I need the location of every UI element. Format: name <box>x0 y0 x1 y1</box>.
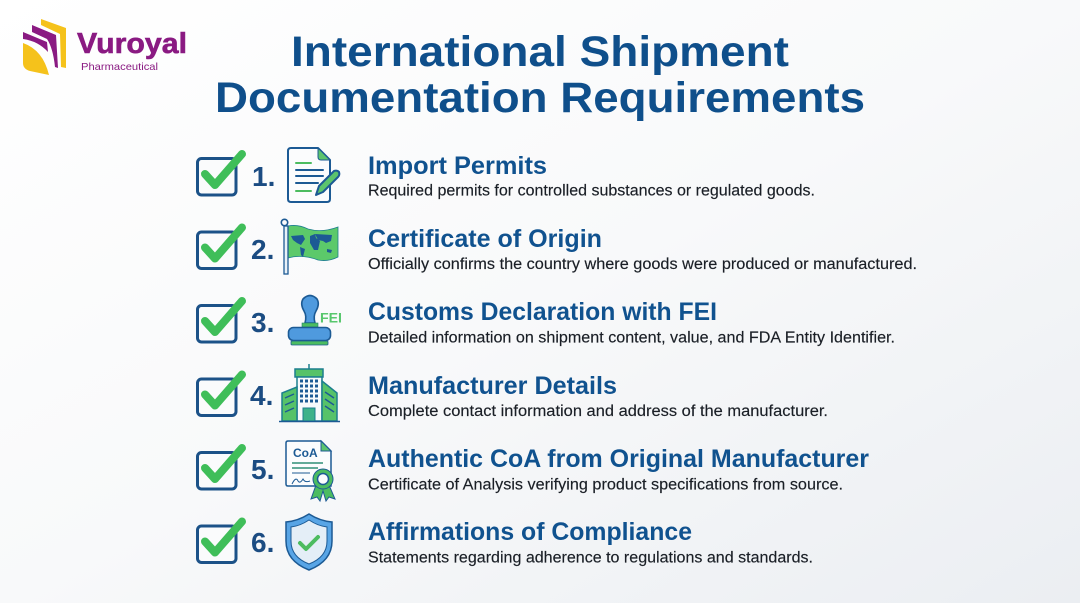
checkbox <box>198 448 242 489</box>
item 6: affirmations of compliance <box>198 514 813 570</box>
icon: document with pencil <box>288 148 339 202</box>
number: 2. <box>251 234 274 265</box>
checkbox <box>198 228 242 268</box>
icon: flag with world map <box>281 219 338 274</box>
item 5: certificate of analysis <box>198 441 869 501</box>
checkbox <box>198 154 242 195</box>
item 3: customs declaration <box>198 296 895 346</box>
heading: Import Permits <box>368 152 547 180</box>
number: 1. <box>252 161 275 192</box>
icon: CoA document with ribbon: CoA <box>293 446 318 460</box>
description: Detailed information on shipment content, value, and FDA Entity Identifier. <box>368 330 895 346</box>
checkbox <box>198 522 242 562</box>
item 4: manufacturer details <box>198 364 828 422</box>
number: 5. <box>251 454 274 485</box>
logo <box>23 19 187 75</box>
logo wordmark: Vuroyal <box>77 28 187 60</box>
number: 4. <box>250 380 273 411</box>
heading: Customs Declaration with FEI <box>368 298 717 326</box>
title <box>215 28 865 122</box>
icon: shield with check <box>286 514 332 570</box>
item 2: certificate of origin <box>198 219 917 274</box>
heading: Manufacturer Details <box>368 372 617 400</box>
heading: Authentic CoA from Original Manufacturer <box>368 445 869 473</box>
number: 6. <box>251 527 274 558</box>
title: International Shipment <box>291 28 789 76</box>
icon: FEI stamp <box>288 296 342 345</box>
number: 3. <box>251 307 274 338</box>
logo mark <box>23 19 66 75</box>
description: Officially confirms the country where goods were produced or manufactured. <box>368 256 917 273</box>
icon: FEI stamp: FEI <box>320 310 342 326</box>
description: Certificate of Analysis verifying product specifications from source. <box>368 476 843 494</box>
description: Required permits for controlled substances or regulated goods. <box>368 182 815 200</box>
checkbox <box>198 374 242 416</box>
description: Statements regarding adherence to regulations and standards. <box>368 550 813 566</box>
heading: Affirmations of Compliance <box>368 518 692 546</box>
icon: CoA document with ribbon <box>286 441 335 501</box>
logo tagline: Pharmaceutical <box>81 61 158 73</box>
icon: office building <box>279 364 340 422</box>
title: Documentation Requirements <box>215 74 865 122</box>
checkbox <box>198 301 242 342</box>
description: Complete contact information and address of the manufacturer. <box>368 403 828 420</box>
item 1: import permits <box>198 148 815 202</box>
heading: Certificate of Origin <box>368 225 602 253</box>
